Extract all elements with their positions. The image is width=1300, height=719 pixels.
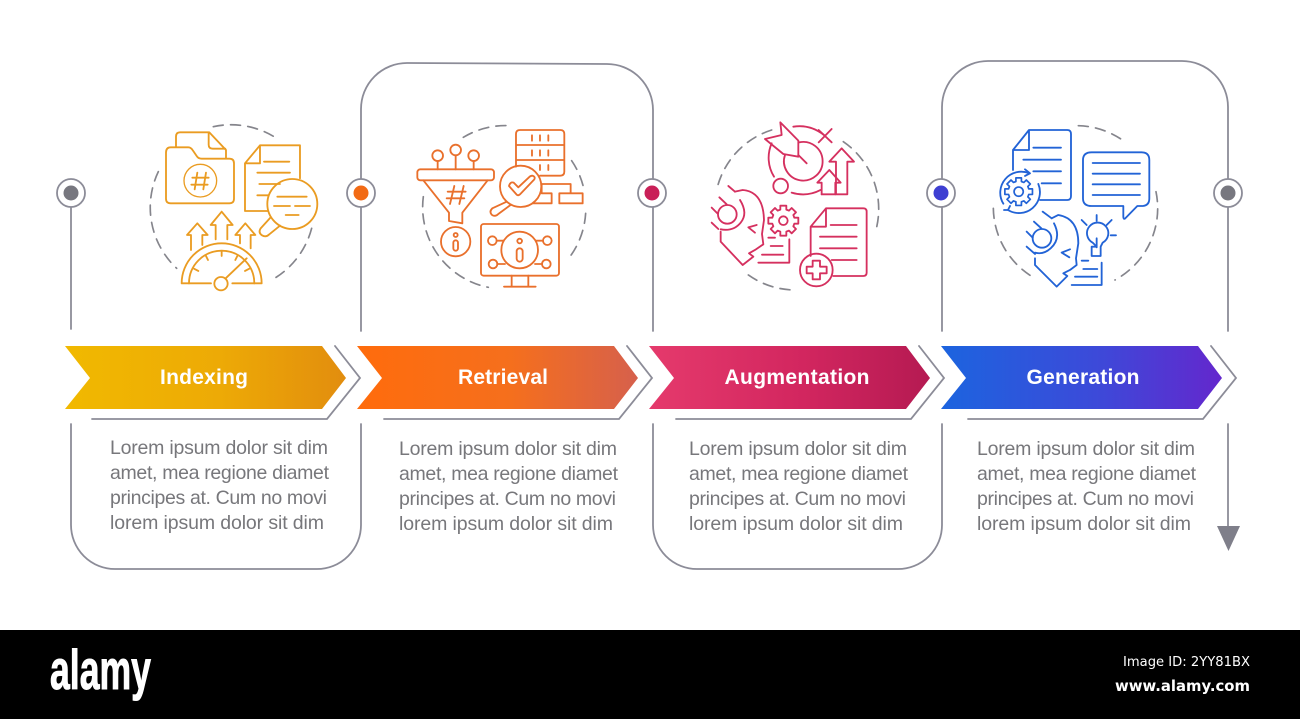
icon: generation	[993, 126, 1158, 287]
arrow banner: augmentation	[649, 346, 944, 419]
node 2	[347, 179, 375, 207]
arrow end	[1217, 526, 1240, 551]
text: generation: amet, mea regione diamet	[977, 463, 1197, 485]
icon: augmentation	[712, 122, 879, 290]
text: augmentation: amet, mea regione diamet	[689, 463, 909, 485]
text: generation	[977, 438, 1197, 535]
arrow banner: generation	[941, 346, 1236, 419]
arrow banner: augmentation: Augmentation	[724, 366, 870, 389]
text: generation: Lorem ipsum dolor sit dim	[977, 438, 1195, 460]
text: generation: principes at. Cum no movi	[977, 488, 1194, 510]
text: augmentation: principes at. Cum no movi	[689, 488, 906, 510]
arrow banner: generation: Generation	[1026, 366, 1140, 389]
text: indexing: Lorem ipsum dolor sit dim	[110, 437, 328, 459]
arrow banner: retrieval	[357, 346, 652, 419]
text: indexing	[110, 437, 330, 534]
text: indexing: principes at. Cum no movi	[110, 487, 327, 509]
arrow banner: indexing	[65, 346, 360, 419]
arrow banner: indexing: Indexing	[160, 366, 248, 389]
text: retrieval: Lorem ipsum dolor sit dim	[399, 438, 617, 460]
text: augmentation: Lorem ipsum dolor sit dim	[689, 438, 907, 460]
watermark bar: Image ID: 2YY81BX	[1123, 654, 1250, 670]
text: retrieval: lorem ipsum dolor sit dim	[399, 513, 613, 535]
text: augmentation: lorem ipsum dolor sit dim	[689, 513, 903, 535]
text: indexing: lorem ipsum dolor sit dim	[110, 512, 324, 534]
text: indexing: amet, mea regione diamet	[110, 462, 330, 484]
node 4	[927, 179, 955, 207]
watermark bar: alamy	[50, 638, 151, 701]
text: generation: lorem ipsum dolor sit dim	[977, 513, 1191, 535]
text: augmentation	[689, 438, 909, 535]
text: retrieval: principes at. Cum no movi	[399, 488, 616, 510]
text: retrieval: amet, mea regione diamet	[399, 463, 619, 485]
node 1	[57, 179, 85, 207]
text: retrieval	[399, 438, 619, 535]
icon: retrieval	[417, 126, 586, 287]
process outline	[71, 61, 1228, 569]
arrow banner: retrieval: Retrieval	[458, 366, 548, 389]
watermark bar	[0, 630, 1300, 719]
icon: indexing	[150, 125, 317, 290]
node 3	[638, 179, 666, 207]
node 5	[1214, 179, 1242, 207]
watermark bar: www.alamy.com	[1115, 677, 1250, 695]
